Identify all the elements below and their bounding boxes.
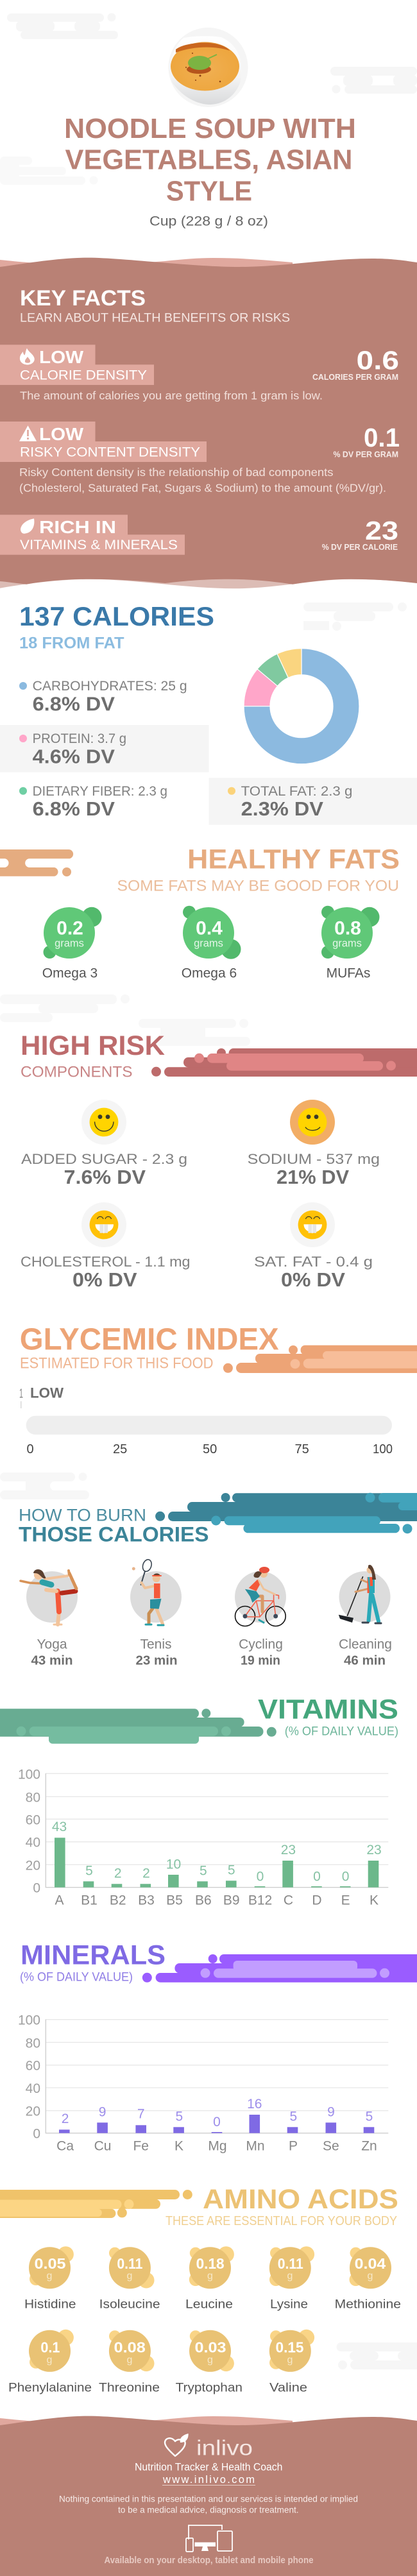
stat: omega 6: 0.4 <box>196 918 223 939</box>
bar chart: vitamins: 40 <box>26 1836 40 1850</box>
legend: protein: 4.6% DV <box>33 746 115 767</box>
risk item: sodium <box>248 1100 380 1188</box>
amino acid: lysine: g <box>287 2271 293 2282</box>
bar chart: vitamins: 2 <box>142 1866 150 1881</box>
logo: inlivo: inlivo <box>196 2436 253 2460</box>
legend: protein <box>19 731 126 767</box>
bar chart: vitamins: B6 <box>195 1893 212 1907</box>
icon: cleaning figure <box>339 1565 381 1623</box>
donut chart: calorie sources <box>244 649 359 764</box>
bar chart: minerals: Se <box>323 2139 339 2154</box>
bar chart: vitamins: B5 <box>166 1893 183 1907</box>
bar chart: vitamins: 10 <box>166 1857 181 1872</box>
icon: grinning face <box>90 1211 118 1239</box>
heading: vitamins: VITAMINS <box>258 1694 398 1725</box>
risk item: cholesterol: 0% DV <box>72 1269 137 1291</box>
icon: slightly smiling face <box>298 1108 327 1136</box>
heading: calories: 137 CALORIES <box>19 601 214 631</box>
amino acid: lysine <box>269 2246 314 2311</box>
fact: risky content density: % DV PER GRAM <box>334 449 398 459</box>
icon: smiling face <box>90 1108 118 1136</box>
subheading: components: COMPONENTS <box>21 1063 132 1080</box>
panel: footer <box>0 2416 417 2576</box>
amino acid: histidine: 0.05 <box>35 2255 66 2272</box>
heading: healthy fats: HEALTHY FATS <box>187 844 400 874</box>
activity: cycling <box>235 1567 286 1668</box>
legend: protein: PROTEIN: 3.7 g <box>33 731 126 746</box>
risk item: added sugar <box>21 1100 187 1188</box>
legend: dietary fiber: 6.8% DV <box>33 798 115 820</box>
amino acid: valine: g <box>287 2355 293 2366</box>
risk item: saturated fat: SAT. FAT - 0.4 g <box>254 1254 373 1270</box>
title <box>64 114 356 207</box>
activity: tennis: 23 min <box>136 1653 177 1668</box>
website link: www.inlivo.com <box>162 2474 255 2486</box>
stat: omega 6: Omega 6 <box>182 966 237 980</box>
bar chart: minerals: 100 <box>18 2013 40 2028</box>
risk item: sodium: 21% DV <box>277 1166 350 1188</box>
bar chart: vitamins: 0 <box>33 1881 40 1896</box>
amino acid: leucine <box>185 2246 234 2311</box>
availability note: Available on your desktop, tablet and mobile phone <box>104 2555 313 2566</box>
amino acid: valine: 0.15 <box>276 2339 304 2355</box>
activity: cycling: 19 min <box>241 1653 280 1668</box>
risk item: saturated fat: 0% DV <box>281 1269 346 1291</box>
disclaimer <box>59 2494 358 2515</box>
glycemic index scale: 100 <box>373 1442 393 1456</box>
bar chart: vitamins: B3 <box>138 1893 155 1907</box>
fact: rich in vitamins and minerals: % DV PER CALORIE <box>322 542 398 552</box>
amino acid: histidine: Histidine <box>24 2298 76 2311</box>
amino acid: methionine <box>335 2247 401 2311</box>
glycemic index scale: 75 <box>295 1442 309 1456</box>
subheading: glycemic index: ESTIMATED FOR THIS FOOD <box>20 1355 213 1372</box>
amino acid: valine: Valine <box>269 2382 307 2394</box>
amino acid: histidine <box>24 2246 76 2311</box>
bar chart: vitamins: 100 <box>18 1767 40 1782</box>
risk item: added sugar: ADDED SUGAR - 2.3 g <box>21 1151 187 1167</box>
activity: yoga: Yoga <box>37 1637 67 1651</box>
amino acid: histidine: g <box>47 2271 52 2282</box>
panel: macronutrient legend <box>0 679 417 825</box>
stat: omega 6 <box>182 906 241 980</box>
activity: yoga <box>21 1569 78 1668</box>
bar chart: vitamins: 5 <box>200 1864 207 1879</box>
title: STYLE <box>166 176 252 207</box>
fact: calorie density <box>0 345 399 402</box>
legend: carbohydrates: 6.8% DV <box>33 694 115 715</box>
glycemic index scale <box>19 1385 393 1456</box>
stat: omega 3: 0.2 <box>56 918 83 939</box>
bar chart: minerals: Mg <box>208 2139 227 2154</box>
risk item: saturated fat <box>254 1202 373 1291</box>
bar chart: vitamins: 0 <box>313 1870 321 1884</box>
fact: calorie density: LOW <box>39 347 84 367</box>
logo: inlivo <box>165 2434 253 2460</box>
amino acid: valine <box>269 2330 314 2394</box>
bar chart: minerals: 2 <box>62 2111 69 2126</box>
amino acid: isoleucine <box>99 2247 160 2311</box>
bar chart: vitamins: 0 <box>257 1870 264 1884</box>
bar chart: minerals: 80 <box>26 2036 40 2051</box>
bar chart: vitamins: 20 <box>26 1858 40 1873</box>
icon: soup bowl <box>168 28 248 107</box>
activity: cleaning: 46 min <box>344 1653 386 1668</box>
bar chart: minerals: Zn <box>361 2139 377 2154</box>
fact: risky content density: 0.1 <box>364 423 400 452</box>
bar chart: minerals: 0 <box>33 2127 40 2142</box>
legend: total fat <box>228 784 352 820</box>
glycemic index scale: 1 <box>19 1386 23 1401</box>
fact: risky content density <box>0 422 400 495</box>
bar chart: vitamins: 5 <box>85 1864 93 1879</box>
bar chart: minerals: 16 <box>247 2097 262 2111</box>
bar chart: vitamins: B2 <box>110 1893 126 1907</box>
bar chart: minerals: 60 <box>26 2059 40 2074</box>
glycemic index scale: 0 <box>27 1442 34 1456</box>
title: VEGETABLES, ASIAN <box>65 145 353 176</box>
heading: how to burn those calories: THOSE CALORIES <box>19 1523 209 1546</box>
heading: high risk: HIGH RISK <box>21 1030 165 1061</box>
amino acid: leucine: g <box>207 2271 213 2282</box>
subheading: calories from fat: 18 FROM FAT <box>19 635 124 653</box>
glycemic index scale: 50 <box>203 1442 217 1456</box>
bar chart: vitamins: D <box>312 1893 322 1907</box>
bar chart: vitamins: 60 <box>26 1813 40 1827</box>
bar chart: vitamins: 23 <box>281 1843 296 1857</box>
activity: yoga: 43 min <box>31 1653 73 1668</box>
activity: cycling: Cycling <box>239 1637 283 1651</box>
amino acid: threonine <box>99 2330 160 2394</box>
fact: rich in vitamins and minerals: VITAMINS & MINERALS <box>20 537 178 552</box>
subheading: vitamins: (% OF DAILY VALUE) <box>285 1724 398 1738</box>
amino acid: tryptophan: Tryptophan <box>176 2382 243 2394</box>
icon: flame <box>20 348 35 364</box>
risk item: added sugar: 7.6% DV <box>64 1166 146 1188</box>
bar chart: vitamins: K <box>370 1893 379 1907</box>
fact: rich in vitamins and minerals: RICH IN <box>39 517 116 537</box>
stat: omega 3 <box>42 907 101 980</box>
stat: omega 3: Omega 3 <box>42 966 98 980</box>
fact: calorie density: 0.6 <box>357 346 399 375</box>
heading: glycemic index: GLYCEMIC INDEX <box>20 1323 279 1356</box>
bar chart: vitamins: A <box>55 1893 64 1907</box>
bar chart: minerals: 40 <box>26 2081 40 2096</box>
bar chart: vitamins: 23 <box>366 1843 382 1857</box>
amino acid: tryptophan: 0.03 <box>195 2339 226 2355</box>
bar chart: vitamins: 80 <box>26 1790 40 1805</box>
legend: total fat: 2.3% DV <box>241 798 324 820</box>
heading: amino acids: AMINO ACIDS <box>203 2184 398 2215</box>
fact: rich in vitamins and minerals <box>0 515 398 555</box>
activity: cleaning: Cleaning <box>339 1637 392 1651</box>
bar chart: minerals: 0 <box>213 2115 221 2129</box>
glycemic index scale: 25 <box>113 1442 127 1456</box>
heading: how to burn those calories: HOW TO BURN <box>19 1506 146 1525</box>
amino acid: phenylalanine: g <box>47 2355 52 2366</box>
stat: omega 6: grams <box>194 938 223 950</box>
stat: mufas <box>321 906 380 980</box>
fact: risky content density: Risky Content density is the relationship of bad components <box>19 466 334 479</box>
subheading: minerals: (% OF DAILY VALUE) <box>20 1970 133 1984</box>
bar chart: minerals: 5 <box>366 2109 373 2124</box>
heading: key facts: KEY FACTS <box>20 286 146 311</box>
bar chart: minerals <box>18 2013 388 2154</box>
fact: rich in vitamins and minerals: 23 <box>365 516 398 545</box>
amino acid: methionine: g <box>368 2271 373 2282</box>
stat: mufas: 0.8 <box>334 918 361 939</box>
bar chart: minerals: 20 <box>26 2104 40 2119</box>
icon: cycling figure <box>235 1567 285 1626</box>
risk item: cholesterol: CHOLESTEROL - 1.1 mg <box>21 1254 190 1270</box>
activity: tennis <box>130 1558 182 1668</box>
heading: minerals: MINERALS <box>21 1940 166 1971</box>
bar chart: minerals: Ca <box>56 2139 74 2154</box>
amino acid: threonine: Threonine <box>99 2382 160 2394</box>
bar chart: minerals: 9 <box>99 2104 106 2119</box>
risk item: cholesterol <box>21 1202 190 1291</box>
fact: calorie density: CALORIE DENSITY <box>20 368 147 383</box>
bar chart: minerals: K <box>174 2139 183 2154</box>
bar chart: minerals: 9 <box>327 2104 335 2119</box>
bar chart: minerals: P <box>289 2139 298 2154</box>
disclaimer: to be a medical advice, diagnosis or treatment. <box>118 2505 299 2515</box>
bar chart: vitamins: 5 <box>228 1863 235 1878</box>
icon: grinning face <box>298 1211 327 1239</box>
icon: leaf <box>21 518 34 534</box>
subheading: healthy fats: SOME FATS MAY BE GOOD FOR YOU <box>117 877 399 894</box>
amino acid: threonine: 0.08 <box>114 2339 146 2355</box>
icon: warning triangle <box>19 425 37 441</box>
bar chart: vitamins: 2 <box>114 1866 122 1881</box>
title: NOODLE SOUP WITH <box>64 114 356 144</box>
panel: key facts <box>0 258 417 588</box>
amino acid: lysine: 0.11 <box>278 2255 303 2272</box>
legend: dietary fiber <box>19 784 167 820</box>
fact: risky content density: (Cholesterol, Saturated Fat, Sugars & Sodium) to the amount (%DV/gr). <box>19 482 386 495</box>
risk item: sodium: SODIUM - 537 mg <box>248 1151 380 1167</box>
amino acid: isoleucine: g <box>127 2271 132 2282</box>
bar chart: minerals: Mn <box>246 2139 265 2154</box>
bar chart: minerals: Cu <box>94 2139 111 2154</box>
stat: omega 3: grams <box>55 938 84 950</box>
bar chart: vitamins: B9 <box>223 1893 240 1907</box>
amino acid: methionine: Methionine <box>335 2298 401 2311</box>
bar chart: vitamins: E <box>341 1893 350 1907</box>
bar chart: minerals: 5 <box>289 2109 297 2124</box>
disclaimer: Nothing contained in this presentation and our services is intended or implied <box>59 2494 358 2504</box>
icon: devices <box>186 2525 232 2552</box>
fact: calorie density: The amount of calories you are getting from 1 gram is low. <box>20 389 323 402</box>
amino acid: tryptophan <box>176 2330 243 2394</box>
amino acid: lysine: Lysine <box>270 2298 308 2311</box>
activity: tennis: Tenis <box>140 1637 172 1651</box>
amino acid: tryptophan: g <box>207 2355 213 2366</box>
heading: how to burn those calories <box>19 1506 209 1546</box>
legend: dietary fiber: DIETARY FIBER: 2.3 g <box>33 784 167 799</box>
stat: mufas: grams <box>332 938 362 950</box>
amino acid: phenylalanine <box>8 2330 92 2394</box>
bar chart: vitamins: 0 <box>342 1870 349 1884</box>
amino acid: phenylalanine: Phenylalanine <box>8 2382 92 2394</box>
legend: total fat: TOTAL FAT: 2.3 g <box>241 784 352 799</box>
bar chart: vitamins: B1 <box>81 1893 98 1907</box>
legend: carbohydrates: CARBOHYDRATES: 25 g <box>33 679 187 694</box>
glycemic index scale: LOW <box>30 1385 64 1401</box>
icon: yoga figure <box>21 1569 76 1625</box>
fact: risky content density: LOW <box>39 424 84 444</box>
bar chart: minerals: Fe <box>133 2139 149 2154</box>
amino acid: phenylalanine: 0.1 <box>40 2339 60 2355</box>
fact: risky content density: RISKY CONTENT DENSITY <box>20 445 200 460</box>
amino acid: methionine: 0.04 <box>355 2255 386 2272</box>
legend: carbohydrates <box>19 679 187 715</box>
amino acid: isoleucine: Isoleucine <box>99 2298 160 2311</box>
bar chart: vitamins: B12 <box>248 1893 272 1907</box>
bar chart: minerals: 7 <box>137 2107 145 2122</box>
bar chart: vitamins: C <box>284 1893 293 1907</box>
stat: mufas: MUFAs <box>327 966 370 980</box>
fact: calorie density: CALORIES PER GRAM <box>312 372 398 382</box>
amino acid: isoleucine: 0.11 <box>117 2255 143 2272</box>
bar chart: minerals: 5 <box>176 2109 183 2124</box>
activity: cleaning <box>339 1565 392 1668</box>
serving size: Cup (228 g / 8 oz) <box>149 214 268 229</box>
amino acid: threonine: g <box>127 2355 132 2366</box>
subheading: key facts: LEARN ABOUT HEALTH BENEFITS OR RISKS <box>20 311 290 325</box>
bar chart: vitamins: 43 <box>52 1820 67 1834</box>
bar chart: vitamins <box>18 1767 388 1907</box>
icon: tennis figure <box>132 1558 164 1625</box>
amino acid: leucine: 0.18 <box>196 2255 225 2272</box>
tagline: Nutrition Tracker & Health Coach <box>135 2462 282 2473</box>
amino acid: leucine: Leucine <box>185 2298 233 2311</box>
